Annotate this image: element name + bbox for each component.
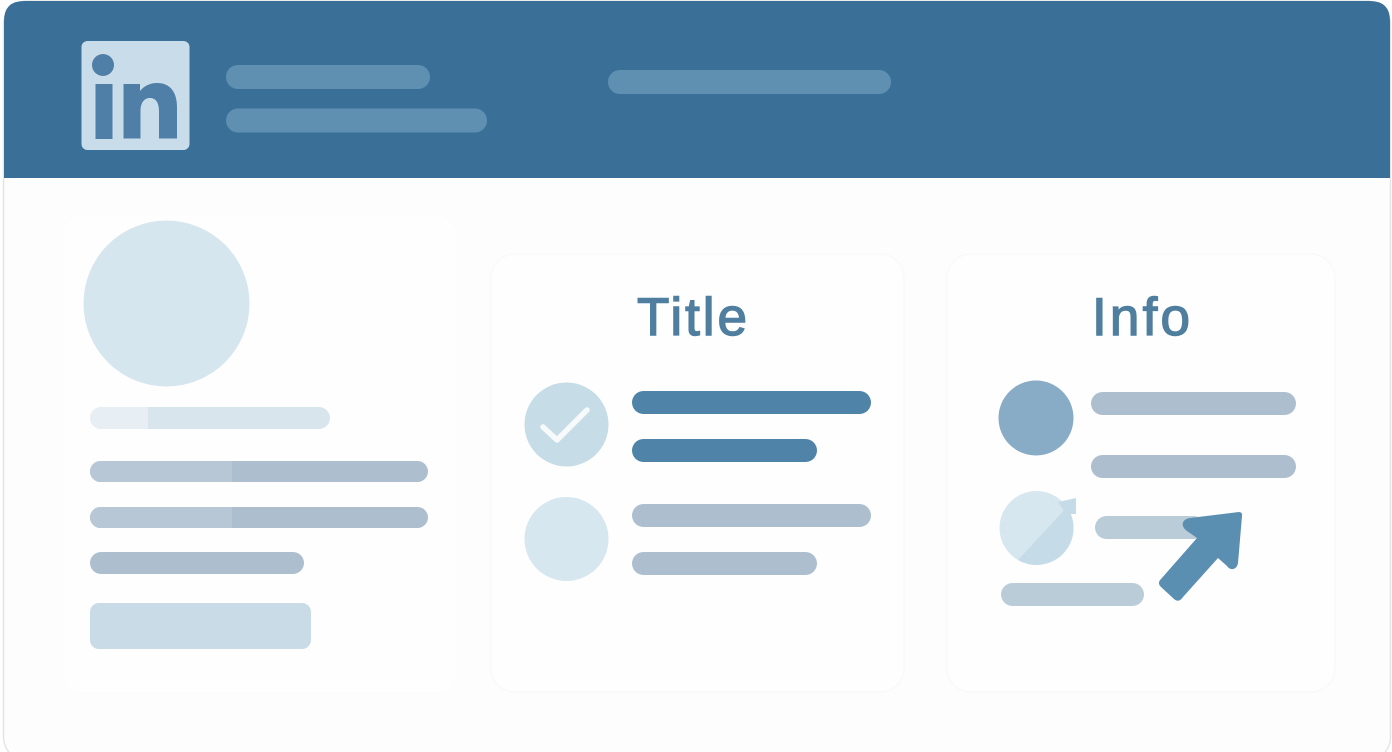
icon: LinkedIn logo [82, 41, 190, 150]
header bar [4, 1, 1390, 178]
icon: check circle [524, 382, 608, 466]
panel: info [947, 254, 1335, 692]
panel: title [491, 254, 904, 692]
muted lines [632, 504, 871, 575]
info short lines [1001, 516, 1205, 606]
name line [90, 407, 330, 429]
icon: pie circle [1000, 491, 1076, 565]
arrow [1159, 512, 1242, 601]
panel: profile [62, 215, 457, 693]
info lines [1091, 392, 1296, 478]
profile detail lines [90, 461, 428, 574]
avatar circle [84, 220, 250, 386]
icon: solid circle [998, 380, 1074, 456]
heading: Info: Info [1092, 288, 1190, 347]
icon: empty circle [524, 497, 608, 581]
heading: Title: Title [637, 288, 747, 347]
highlighted lines [632, 391, 871, 462]
profile button [90, 603, 311, 649]
header placeholder lines [226, 65, 891, 132]
